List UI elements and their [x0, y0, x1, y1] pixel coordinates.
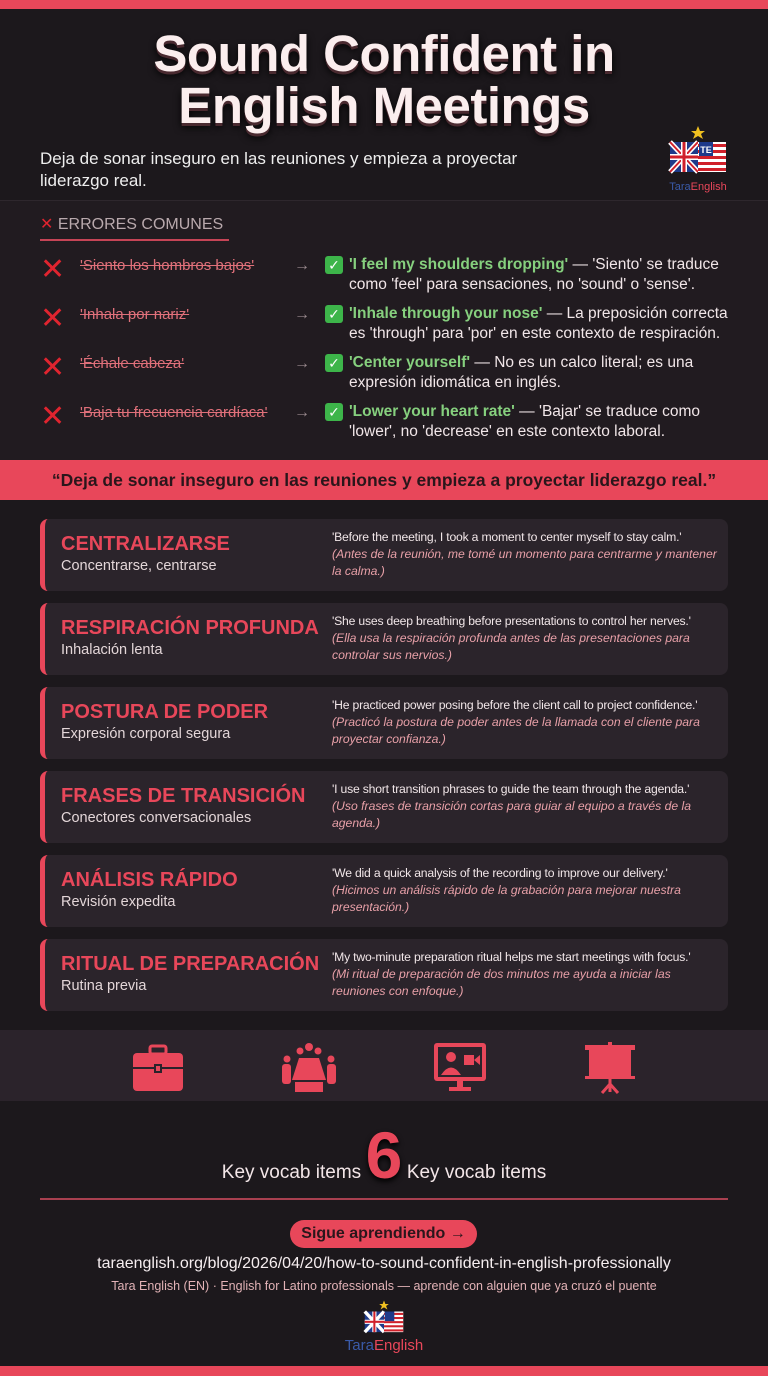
button: Sigue aprendiendo →	[301, 1225, 466, 1242]
error row 1: 'I feel my shoulders dropping' — 'Siento' se traduce como 'feel' para sensaciones, no 'sound' o 'sense'.	[349, 256, 719, 293]
error row 1: ✓	[328, 257, 340, 273]
subtitle: Deja de sonar inseguro en las reuniones y empieza a proyectar liderazgo real.	[40, 149, 517, 190]
error row 3: 'Échale cabeza'	[80, 355, 184, 372]
card 2: 'She uses deep breathing before presentations to control her nerves.'	[332, 614, 691, 628]
quote banner: “Deja de sonar inseguro en las reuniones y empieza a proyectar liderazgo real.”	[52, 470, 716, 490]
logo bottom	[345, 1300, 423, 1354]
error row 3: 'Center yourself' — No es un calco literal; es una expresión idiomática en inglés.	[349, 354, 693, 391]
error row 4: 'Lower your heart rate' — 'Bajar' se traduce como 'lower', no 'decrease' en este contexto laboral.	[349, 403, 700, 440]
card 4: (Uso frases de transición cortas para guiar al equipo a través de la agenda.)	[332, 799, 691, 830]
icon: briefcase	[133, 1044, 183, 1091]
card 5: (Hicimos un análisis rápido de la grabación para mejorar nuestra presentación.)	[332, 883, 681, 914]
card 2: Inhalación lenta	[61, 642, 163, 658]
card 6: 'My two-minute preparation ritual helps me start meetings with focus.'	[332, 950, 690, 964]
bottom bar	[0, 1366, 768, 1376]
stat: 6 key vocab items: Key vocab items 6 Key vocab items	[222, 1118, 546, 1192]
error row 4: →	[294, 404, 310, 421]
card 3: POSTURA DE PODER	[61, 701, 268, 723]
icon: projector screen	[585, 1042, 635, 1094]
error row 2: →	[294, 306, 310, 323]
error row 4: ✕	[40, 400, 65, 433]
errors heading	[40, 214, 229, 241]
title: English Meetings	[178, 77, 590, 134]
quote banner	[0, 460, 768, 500]
card 1: (Antes de la reunión, me tomé un momento para centrarme y mantener la calma.)	[332, 547, 717, 578]
logo top: TaraEnglish	[669, 181, 727, 193]
error row 1: ✕	[40, 253, 65, 286]
card 5: ANÁLISIS RÁPIDO	[61, 869, 238, 891]
error row 4: 'Baja tu frecuencia cardíaca'	[80, 404, 268, 421]
icon: video call	[434, 1043, 486, 1091]
error row 3	[40, 351, 694, 391]
card 6: Rutina previa	[61, 978, 146, 994]
error row 3: ✕	[40, 351, 65, 384]
error row 1: →	[294, 257, 310, 274]
error row 3: →	[294, 355, 310, 372]
error row 2: ✓	[328, 306, 340, 322]
error row 2	[40, 302, 728, 342]
divider	[40, 1198, 728, 1200]
card 1: Concentrarse, centrarse	[61, 558, 217, 574]
tagline: Tara English (EN) · English for Latino professionals — aprende con alguien que ya cruzó el puente	[111, 1279, 657, 1293]
card 1	[40, 519, 728, 591]
card 4	[40, 771, 728, 843]
card 3: Expresión corporal segura	[61, 726, 230, 742]
top bar	[0, 0, 768, 9]
error row 1	[40, 253, 719, 293]
error row 4: ✓	[328, 404, 340, 420]
errors section	[0, 200, 768, 460]
icons band	[0, 1030, 768, 1101]
button	[290, 1220, 477, 1248]
error row 3: ✓	[328, 355, 340, 371]
card 6: (Mi ritual de preparación de dos minutos me ayuda a iniciar las reuniones con enfoque.)	[332, 967, 671, 998]
card 5	[40, 855, 728, 927]
error row 1: 'Siento los hombros bajos'	[80, 257, 254, 274]
error row 2: ✕	[40, 302, 65, 335]
error row 2: 'Inhale through your nose' — La preposición correcta es 'through' para 'por' en este contexto de respiración.	[349, 305, 728, 342]
card 2	[40, 603, 728, 675]
card 1: 'Before the meeting, I took a moment to center myself to stay calm.'	[332, 530, 681, 544]
card 3	[40, 687, 728, 759]
card 2: RESPIRACIÓN PROFUNDA	[61, 617, 319, 639]
card 3: 'He practiced power posing before the client call to project confidence.'	[332, 698, 697, 712]
card 6: RITUAL DE PREPARACIÓN	[61, 953, 319, 975]
logo top: TE	[700, 145, 712, 155]
title: Sound Confident in	[153, 25, 615, 82]
errors heading: ✕ ERRORES COMUNES	[40, 216, 223, 233]
card 5: 'We did a quick analysis of the recording to improve our delivery.'	[332, 866, 668, 880]
card 6	[40, 939, 728, 1011]
logo top	[668, 126, 727, 193]
icon: meeting table	[282, 1043, 336, 1092]
logo bottom: TaraEnglish	[345, 1337, 423, 1354]
card 5: Revisión expedita	[61, 894, 175, 910]
card 1: CENTRALIZARSE	[61, 533, 230, 555]
error row 2: 'Inhala por nariz'	[80, 306, 189, 323]
card 3: (Practicó la postura de poder antes de la llamada con el cliente para proyectar confianza.)	[332, 715, 700, 746]
error row 4	[40, 400, 700, 440]
url: taraenglish.org/blog/2026/04/20/how-to-sound-confident-in-english-professionally	[97, 1255, 671, 1272]
card 4: 'I use short transition phrases to guide the team through the agenda.'	[332, 782, 689, 796]
title	[153, 25, 615, 139]
card 2: (Ella usa la respiración profunda antes de las presentaciones para controlar sus nervios.)	[332, 631, 690, 662]
card 4: Conectores conversacionales	[61, 810, 251, 826]
card 4: FRASES DE TRANSICIÓN	[61, 785, 305, 807]
